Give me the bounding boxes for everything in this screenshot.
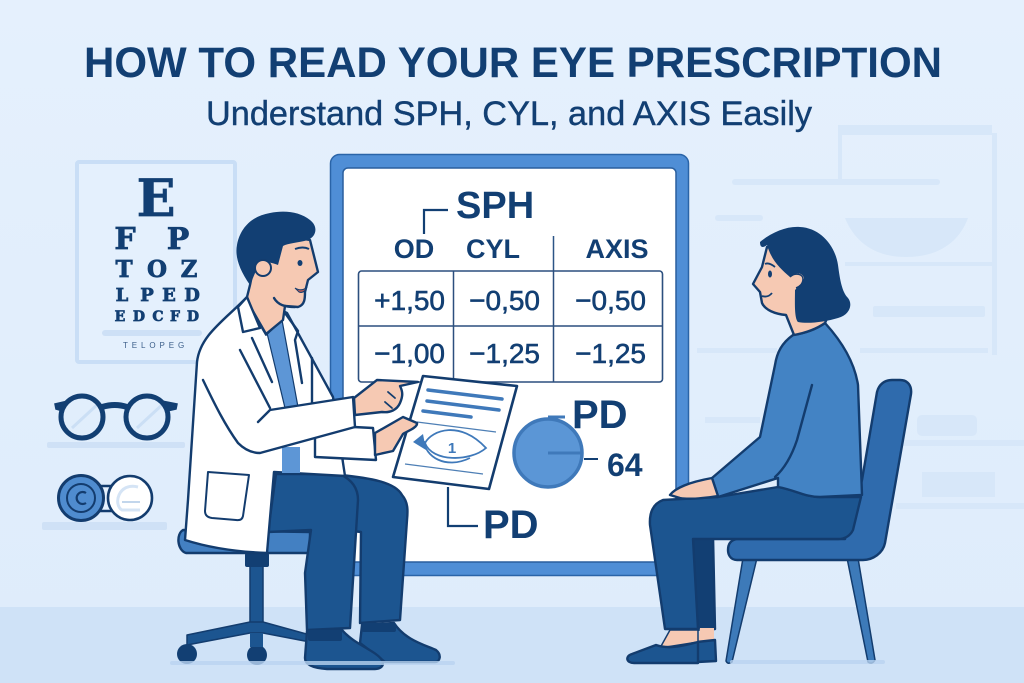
neck and face (753, 227, 850, 335)
patient (627, 227, 862, 663)
subtitle: Understand SPH, CYL, and AXIS Easily (206, 95, 812, 133)
floor shadow (170, 660, 885, 665)
eye chart: D (187, 309, 199, 325)
eye chart: Z (181, 256, 197, 283)
upper sleeve (203, 380, 355, 453)
eye chart (77, 162, 235, 362)
shirt (249, 303, 300, 473)
PD dial (514, 417, 598, 487)
background shelves and furniture (697, 125, 1024, 509)
shoes (305, 623, 440, 669)
value: 64: 64 (607, 447, 643, 483)
prescription paper: 1 (448, 440, 456, 457)
icon: contact lens case (42, 476, 167, 530)
eye chart: E (115, 309, 125, 325)
eye chart: C (152, 309, 164, 325)
title: HOW TO READ YOUR EYE PRESCRIPTION (84, 39, 942, 87)
floor (0, 607, 1024, 683)
trousers (650, 487, 861, 629)
pointing hand (354, 380, 418, 415)
lower hand (375, 417, 417, 455)
lab coat body (185, 297, 345, 553)
patient's chair (726, 380, 911, 663)
label: PD bottom: PD (483, 503, 539, 547)
eye chart: P (140, 285, 154, 306)
label: SPH (424, 185, 534, 234)
eye chart: T (115, 256, 133, 283)
eye chart: F (170, 309, 180, 325)
coat lapels and seams (205, 297, 312, 520)
doctor (185, 212, 517, 669)
sweater (712, 323, 862, 497)
prescription table (358, 236, 662, 382)
prescription table: −1,25 (469, 338, 540, 369)
label: SPH: SPH (456, 185, 534, 227)
label: PD top: PD (572, 393, 628, 437)
prescription paper (393, 376, 517, 489)
eye chart: E (137, 169, 175, 229)
label: PD bottom (448, 487, 539, 547)
eye chart: O (147, 256, 167, 283)
doctor's stool (177, 530, 310, 665)
prescription table: −0,50 (575, 285, 646, 316)
column headers: AXIS (585, 234, 649, 264)
lower sleeve (315, 425, 376, 460)
neck and head (236, 212, 318, 334)
column headers: CYL (466, 234, 520, 264)
prescription table: −1,25 (575, 338, 646, 369)
column headers (394, 234, 649, 264)
eye chart: L (116, 285, 129, 306)
hands on knee (670, 478, 718, 499)
prescription board (330, 154, 688, 576)
eye chart: TELOPEG (123, 341, 188, 350)
trousers (268, 474, 407, 630)
eye chart: F (114, 222, 136, 257)
eye chart: D (133, 309, 145, 325)
prescription table: −0,50 (469, 285, 540, 316)
column headers: OD (394, 234, 434, 264)
icon: glasses (47, 396, 185, 448)
eye chart: P (167, 222, 189, 257)
back leg and shoe (693, 535, 716, 662)
front shoe (627, 630, 698, 663)
eye chart: E (162, 285, 176, 306)
prescription table: +1,50 (374, 285, 445, 316)
eye chart: D (184, 285, 200, 306)
prescription table: −1,00 (374, 338, 445, 369)
